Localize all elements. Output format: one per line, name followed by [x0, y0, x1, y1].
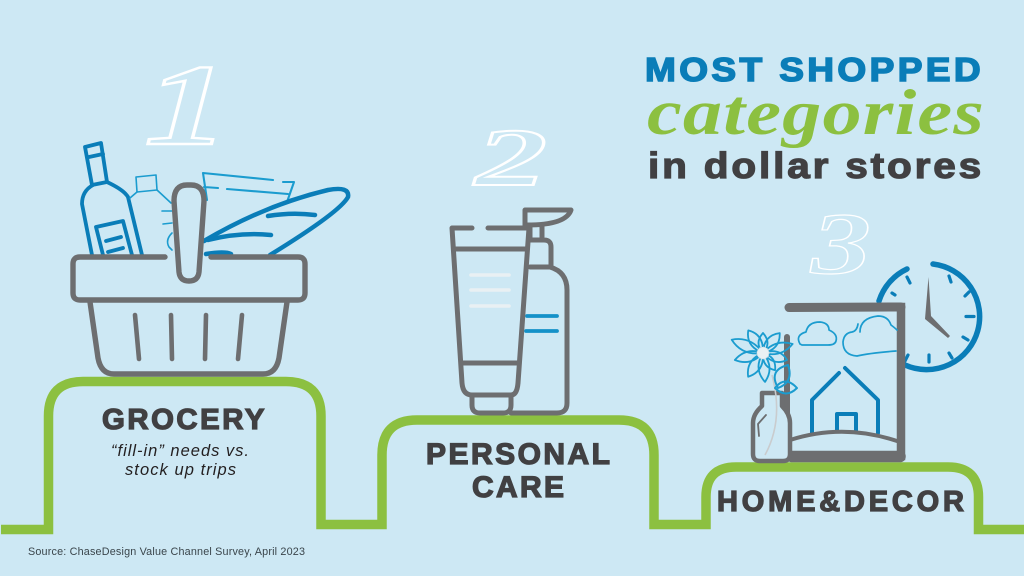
vase highlight: [758, 415, 766, 436]
label: grocery: GROCERY: [102, 404, 267, 436]
clock: [879, 264, 980, 370]
vase and flower: [730, 327, 797, 461]
vase: [753, 393, 790, 461]
clock face arc: [879, 264, 980, 370]
pump bottle blue lines: [526, 316, 557, 331]
basket slats: [135, 315, 242, 359]
label: personal care: CARE: [472, 471, 564, 504]
pump bottle: [511, 210, 571, 413]
icon: home and decor: [730, 264, 980, 461]
clock ticks: [892, 276, 974, 362]
rank number 1: 1: [144, 42, 230, 170]
title line: categories: categories: [647, 77, 985, 149]
basket body: [90, 302, 287, 374]
clock hands: [925, 277, 950, 338]
house: [812, 368, 878, 433]
flower petals: [730, 327, 794, 382]
flower stem: [765, 375, 777, 455]
label: home and decor: HOME&DECOR: [717, 486, 964, 518]
tube highlight lines: [471, 275, 509, 306]
baguette: [204, 189, 348, 255]
icon: grocery basket: [73, 143, 348, 374]
basket handle: [174, 185, 204, 281]
rank number 3: 3: [810, 196, 871, 293]
rank number 2: 2: [473, 112, 547, 203]
grocery description: stock up trips: [125, 461, 236, 479]
green podium stepped line: [1, 382, 1024, 530]
tablet frame: [787, 307, 901, 458]
title: [645, 51, 985, 186]
flower leaves: [775, 365, 797, 394]
label: personal care: PERSONAL: [426, 438, 610, 471]
grocery description: [111, 442, 249, 479]
water bottle: [130, 175, 172, 250]
grocery bag: [203, 173, 294, 202]
basket rim: [73, 257, 305, 300]
hill: [790, 432, 897, 441]
title line: in dollar stores: in dollar stores: [648, 145, 984, 186]
wine bottle: [82, 143, 142, 255]
source note: Source: ChaseDesign Value Channel Survey, April 2023: [28, 546, 305, 558]
label: personal care: [426, 438, 610, 504]
icon: personal care bottles: [452, 210, 571, 413]
grocery description: “fill-in” needs vs.: [111, 442, 249, 460]
tube: [452, 228, 529, 413]
title line: most shopped: MOST SHOPPED: [645, 51, 984, 88]
flower centre: [757, 347, 769, 359]
clouds: [798, 316, 897, 356]
